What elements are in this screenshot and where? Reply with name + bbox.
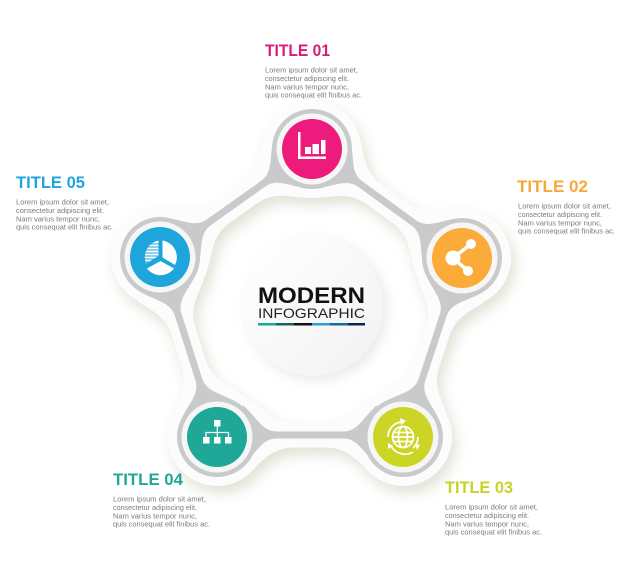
text block: title 05: TITLE 05 — [16, 173, 85, 192]
text block: title 02: Nam varius tempor nunc, — [518, 218, 602, 228]
text block: title 03: quis consequat elit finibus ac. — [445, 528, 542, 536]
white pentagon band with shadow — [111, 100, 511, 486]
text block: title 01: Nam varius tempor nunc, — [265, 82, 349, 92]
center title: MODERN — [258, 283, 365, 308]
center circle — [243, 236, 383, 376]
node 2: share icon — [426, 222, 498, 294]
text block: title 03: TITLE 03 — [445, 478, 513, 497]
text block: title 05: Lorem ipsum dolor sit amet, — [16, 198, 109, 206]
center title: INFOGRAPHIC — [258, 305, 365, 321]
text block: title 01: quis consequat elit finibus ac. — [265, 90, 362, 100]
node 5: pie chart icon — [124, 222, 196, 292]
text block: title 04 — [113, 470, 210, 528]
text block: title 03: Nam varius tempor nunc, — [445, 520, 529, 528]
text block: title 05: consectetur adipiscing elit. — [16, 206, 104, 215]
node 3: globe icon — [368, 402, 438, 472]
text block: title 03: consectetur adipiscing elit. — [445, 511, 529, 520]
text block: title 01 — [265, 41, 362, 100]
text block: title 05 — [16, 173, 113, 232]
center color stripe — [258, 323, 365, 326]
text block: title 02: quis consequat elit finibus ac. — [518, 226, 615, 236]
text block: title 03: Lorem ipsum dolor sit amet, — [445, 502, 538, 512]
text block: title 05: Nam varius tempor nunc, — [16, 214, 100, 224]
text block: title 02: Lorem ipsum dolor sit amet, — [518, 202, 611, 210]
text block: title 01: consectetur adipiscing elit. — [265, 74, 349, 83]
node 4: hierarchy icon — [182, 402, 252, 472]
text block: title 04: TITLE 04 — [113, 470, 184, 489]
text block: title 05: quis consequat elit finibus ac. — [16, 222, 113, 232]
node 1: bar chart icon — [276, 114, 348, 184]
text block: title 01: TITLE 01 — [265, 41, 330, 60]
text block: title 02: TITLE 02 — [517, 177, 588, 196]
text block: title 04: Nam varius tempor nunc, — [113, 512, 197, 520]
center title — [258, 283, 365, 321]
text block: title 03 — [445, 478, 542, 536]
text block: title 04: consectetur adipiscing elit. — [113, 503, 197, 512]
text block: title 04: quis consequat elit finibus ac. — [113, 520, 210, 528]
text block: title 02: consectetur adipiscing elit. — [518, 210, 602, 219]
text block: title 04: Lorem ipsum dolor sit amet, — [113, 494, 206, 504]
text block: title 02 — [517, 177, 615, 236]
gray pentagon connector ring — [120, 109, 502, 477]
text block: title 01: Lorem ipsum dolor sit amet, — [265, 66, 358, 74]
